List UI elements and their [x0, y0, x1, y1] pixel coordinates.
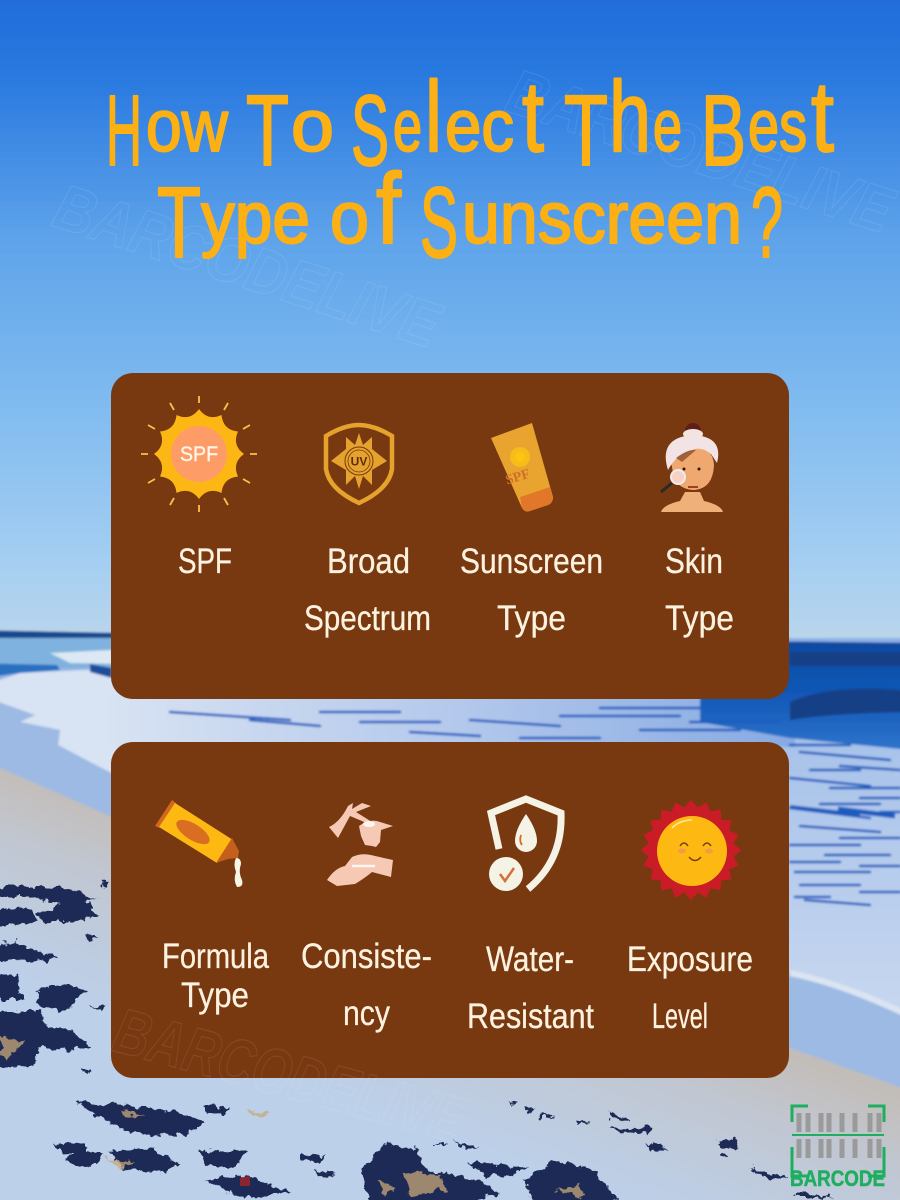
logo: barcode: BARCODE: [790, 1166, 885, 1191]
label: Water-Resistant: [467, 940, 594, 1036]
panel: bottom factors: [111, 742, 789, 1078]
title: unscreen: [462, 178, 742, 259]
label: Broad Spectrum: Spectrum: [304, 599, 431, 638]
red debris: [240, 1176, 250, 1186]
label: Skin Type: [665, 542, 734, 638]
icon: sunscreen tube: SPF: [504, 467, 532, 488]
label: Formula Type: [162, 937, 269, 1015]
icon: UV shield: UV: [351, 454, 367, 468]
title: e: [393, 86, 422, 167]
panel: top factors: [111, 373, 789, 699]
label: Consistency: Consiste-: [301, 937, 432, 976]
label: Sunscreen Type: [460, 542, 603, 638]
title: h: [609, 61, 651, 173]
icon: squeezed tube: [155, 800, 242, 887]
title: S: [351, 75, 389, 187]
title: ype: [201, 178, 310, 259]
label: Consistency: ncy: [343, 994, 390, 1033]
title: t: [522, 61, 544, 173]
seaweed tan debris: [0, 1038, 585, 1198]
label: SPF: SPF: [178, 542, 232, 581]
label: Exposure Level: [627, 940, 753, 1036]
title: T: [564, 75, 608, 187]
title: ec: [445, 86, 514, 167]
title: o: [330, 178, 369, 259]
label: Formula Type: Type: [181, 976, 249, 1015]
label: Sunscreen Type: Sunscreen: [460, 542, 603, 581]
title: H: [106, 75, 142, 187]
title: T: [246, 75, 289, 187]
title: e: [653, 86, 682, 167]
seaweed patches: [0, 880, 835, 1200]
title: T: [157, 167, 201, 279]
title: o: [291, 86, 334, 167]
label: Consistency: [301, 937, 432, 1033]
icon: SPF sun: SPF: [180, 443, 218, 466]
label: Sunscreen Type: Type: [497, 599, 566, 638]
label: Broad Spectrum: Broad: [327, 542, 410, 581]
label: Broad Spectrum: [304, 542, 431, 638]
title: f: [376, 153, 401, 265]
title: B: [701, 75, 746, 187]
title: [106, 61, 834, 279]
watermark: lower left: BARCODELIVE: [106, 994, 474, 1157]
label: Skin Type: Type: [665, 599, 734, 638]
icon: SPF sun: [141, 396, 257, 512]
icon: woman with magnifier: [661, 423, 723, 512]
sea streaks: [170, 708, 900, 905]
title: es: [748, 86, 807, 167]
title: ow: [146, 86, 228, 167]
icon: water-resistant shield: [489, 799, 561, 891]
icon: UV shield: [326, 425, 392, 503]
watermark: upper left: BARCODELIVE: [46, 170, 450, 363]
title: t: [811, 61, 834, 173]
label: Exposure Level: Level: [652, 997, 708, 1036]
label: Exposure Level: Exposure: [627, 940, 753, 979]
label: Formula Type: Formula: [162, 937, 269, 976]
icon: sunscreen tube: [491, 423, 553, 512]
label: Water-Resistant: Water-: [486, 940, 574, 979]
logo: barcode: [790, 1106, 885, 1191]
icon: smiling sun: [642, 801, 740, 899]
title: S: [420, 167, 458, 279]
label: Water-Resistant: Resistant: [467, 997, 594, 1036]
icon: hands applying cream: [327, 803, 393, 886]
title: l: [425, 61, 442, 173]
title: ?: [751, 167, 783, 279]
label: Skin Type: Skin: [665, 542, 723, 581]
